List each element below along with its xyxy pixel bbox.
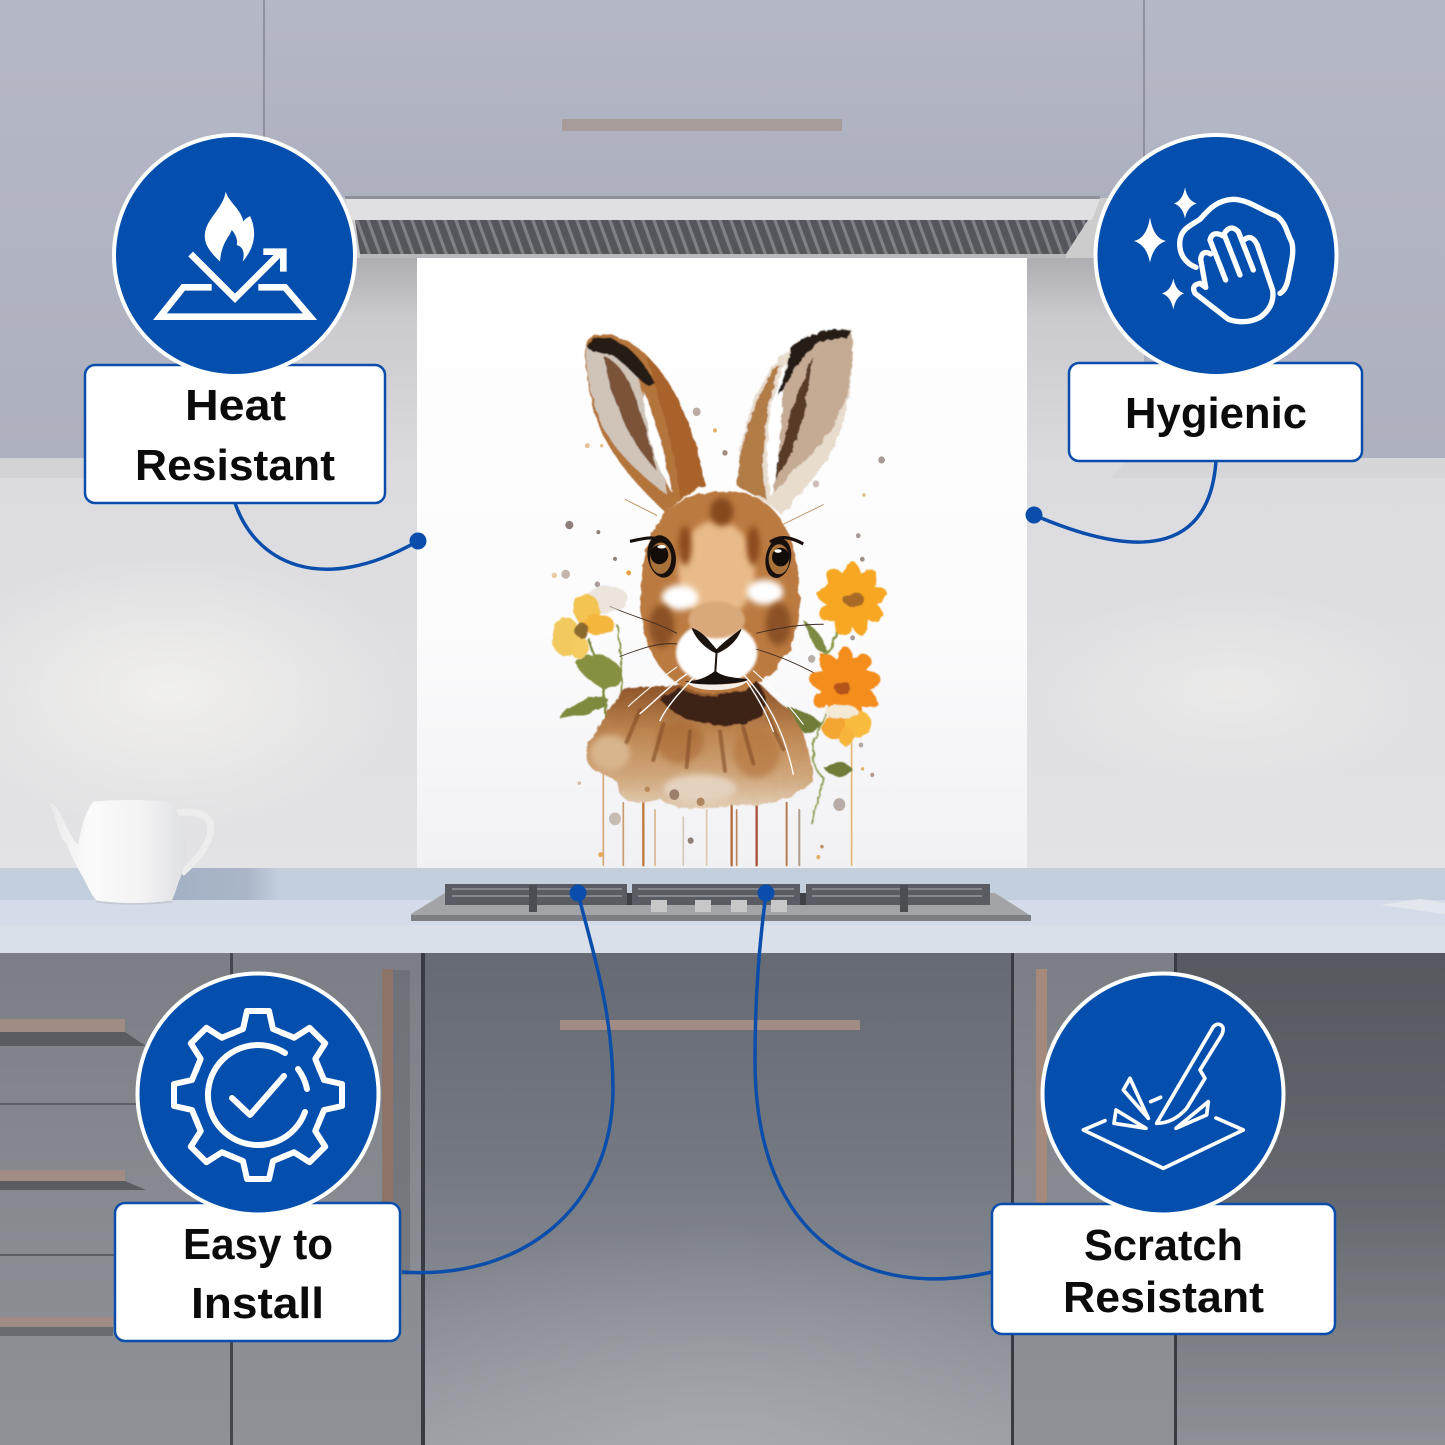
hare artwork bbox=[552, 329, 888, 865]
connector: heat resistant bbox=[235, 503, 426, 569]
wall bbox=[0, 258, 1445, 870]
label box bbox=[115, 1203, 400, 1341]
label box: Resistant bbox=[135, 441, 335, 490]
chest fur wash bbox=[586, 681, 812, 809]
worktop bbox=[0, 899, 1445, 953]
upper cabinets bbox=[0, 0, 1445, 478]
flower: small yellow bbox=[822, 705, 872, 747]
hare head bbox=[610, 491, 823, 774]
right eye bbox=[762, 536, 803, 581]
muzzle bbox=[676, 621, 757, 684]
teapot bbox=[48, 800, 211, 905]
label box: Resistant bbox=[1063, 1273, 1264, 1322]
icon: hand wiping with sparkles bbox=[1096, 135, 1336, 376]
right ear bbox=[737, 329, 853, 515]
icon: knife scratching surface bbox=[1042, 974, 1284, 1214]
cooker hood bbox=[345, 196, 1100, 258]
nose and mouth bbox=[685, 628, 749, 690]
label box: Scratch bbox=[1084, 1221, 1243, 1270]
paint drips bbox=[603, 742, 852, 865]
label box bbox=[1069, 363, 1362, 461]
label box: Hygienic bbox=[1125, 389, 1307, 438]
callout: hygienic bbox=[1069, 135, 1362, 461]
callout: heat resistant bbox=[85, 135, 385, 503]
icon: gear with check bbox=[138, 974, 378, 1214]
flower: lower orange bbox=[808, 646, 882, 724]
flower: top orange bbox=[815, 561, 888, 638]
white glass panel bbox=[417, 258, 1027, 868]
splashback panel with hare artwork bbox=[417, 258, 1027, 868]
label box: Install bbox=[191, 1279, 324, 1328]
paint splatter bbox=[552, 407, 885, 859]
callout: easy to install bbox=[115, 974, 400, 1341]
whiskers bbox=[610, 499, 823, 774]
label box: Heat bbox=[185, 381, 286, 430]
hob bbox=[411, 884, 1031, 921]
left eye bbox=[630, 532, 680, 580]
label box bbox=[992, 1204, 1335, 1334]
left ear bbox=[586, 334, 705, 514]
icon: flame on surface bbox=[114, 135, 355, 376]
lower cabinets bbox=[0, 953, 1445, 1445]
label box: Easy to bbox=[183, 1220, 333, 1269]
connector: hygienic bbox=[1026, 461, 1216, 542]
handles bbox=[0, 969, 1047, 1336]
callout: scratch resistant bbox=[992, 974, 1335, 1334]
label box bbox=[85, 365, 385, 503]
leaves and stems bbox=[560, 617, 853, 824]
upper handle bbox=[562, 119, 842, 131]
connector: scratch resistant bbox=[755, 884, 992, 1279]
dark neck fur bbox=[660, 681, 766, 725]
upstand bbox=[0, 868, 1445, 901]
fur strokes bbox=[627, 710, 783, 771]
connector: easy to install bbox=[402, 884, 613, 1273]
flower: left yellow bbox=[552, 586, 628, 659]
